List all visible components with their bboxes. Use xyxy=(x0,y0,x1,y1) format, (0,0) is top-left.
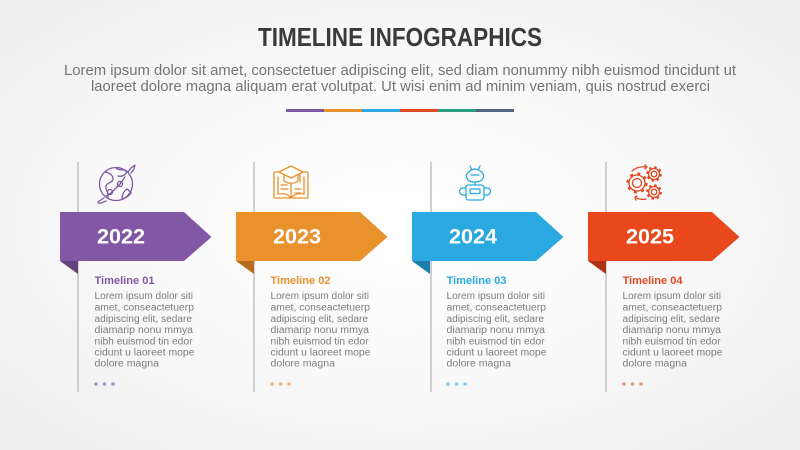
title: TIMELINE INFOGRAPHICS xyxy=(258,24,542,52)
item body: Lorem ipsum dolor siti xyxy=(270,291,369,302)
item body: Lorem ipsum dolor siti xyxy=(622,291,721,302)
item body: dolore magna xyxy=(270,358,336,370)
year: 2022 xyxy=(97,224,145,248)
item body: diamarip nonu mmya xyxy=(622,325,722,336)
item body: adipiscing elit, sedare xyxy=(622,314,721,325)
item body: amet, conseactetuerp xyxy=(94,302,195,314)
dots xyxy=(622,382,643,386)
subtitle text: laoreet dolore magna aliquam erat volutpat. Ut wisi enim ad minim veniam, quis nostrud exerci xyxy=(91,79,710,95)
icon: book and graduation cap xyxy=(274,166,308,198)
item body: adipiscing elit, sedare xyxy=(94,314,193,325)
panel: timeline 2025 xyxy=(588,162,740,392)
item body: amet, conseactetuerp xyxy=(270,302,371,314)
icon: gears xyxy=(628,165,661,200)
item body: cidunt u laoreet mope xyxy=(446,348,547,358)
item body: dolore magna xyxy=(622,358,688,370)
icon: globe xyxy=(98,165,135,203)
year arrow xyxy=(60,212,212,261)
dots xyxy=(94,382,115,386)
item body xyxy=(94,291,195,370)
item body: Lorem ipsum dolor siti xyxy=(446,291,545,302)
item body: cidunt u laoreet mope xyxy=(622,348,723,358)
item body: nibh euismod tin edor xyxy=(446,336,545,347)
year arrow xyxy=(588,212,740,261)
item heading: Timeline 02 xyxy=(270,275,330,287)
year arrow xyxy=(236,212,388,261)
item body: Lorem ipsum dolor siti xyxy=(94,291,193,302)
item body: nibh euismod tin edor xyxy=(94,336,193,347)
item body xyxy=(446,291,547,370)
item body: cidunt u laoreet mope xyxy=(270,348,371,358)
item heading: Timeline 04 xyxy=(622,275,682,287)
item body: amet, conseactetuerp xyxy=(446,302,547,314)
year arrow xyxy=(412,212,564,261)
multicolour divider bar xyxy=(286,109,514,112)
icon: robot xyxy=(460,166,491,200)
subtitle text: Lorem ipsum dolor sit amet, consectetuer adipiscing elit, sed diam nonummy nibh euismod tincidunt ut xyxy=(64,63,736,79)
arrow fold xyxy=(588,261,606,274)
item body: nibh euismod tin edor xyxy=(622,336,721,347)
year: 2025 xyxy=(626,224,674,248)
arrow fold xyxy=(412,261,430,274)
item body: diamarip nonu mmya xyxy=(446,325,546,336)
item body: diamarip nonu mmya xyxy=(270,325,370,336)
item body: amet, conseactetuerp xyxy=(622,302,723,314)
panel: timeline 2022 xyxy=(60,162,212,392)
subtitle text xyxy=(64,63,736,95)
panel: timeline 2023 xyxy=(236,162,388,392)
item body: dolore magna xyxy=(94,358,160,370)
panel: timeline 2024 xyxy=(412,162,564,392)
item body: nibh euismod tin edor xyxy=(270,336,369,347)
dots xyxy=(446,382,467,386)
arrow fold xyxy=(236,261,254,274)
item body: cidunt u laoreet mope xyxy=(94,348,195,358)
item body: diamarip nonu mmya xyxy=(94,325,194,336)
item body xyxy=(622,291,723,370)
item heading: Timeline 01 xyxy=(94,275,154,287)
item body: adipiscing elit, sedare xyxy=(270,314,369,325)
year: 2023 xyxy=(273,224,321,248)
item body: dolore magna xyxy=(446,358,512,370)
item heading: Timeline 03 xyxy=(446,275,506,287)
year: 2024 xyxy=(449,224,497,248)
dots xyxy=(270,382,291,386)
item body xyxy=(270,291,371,370)
item body: adipiscing elit, sedare xyxy=(446,314,545,325)
arrow fold xyxy=(60,261,78,274)
